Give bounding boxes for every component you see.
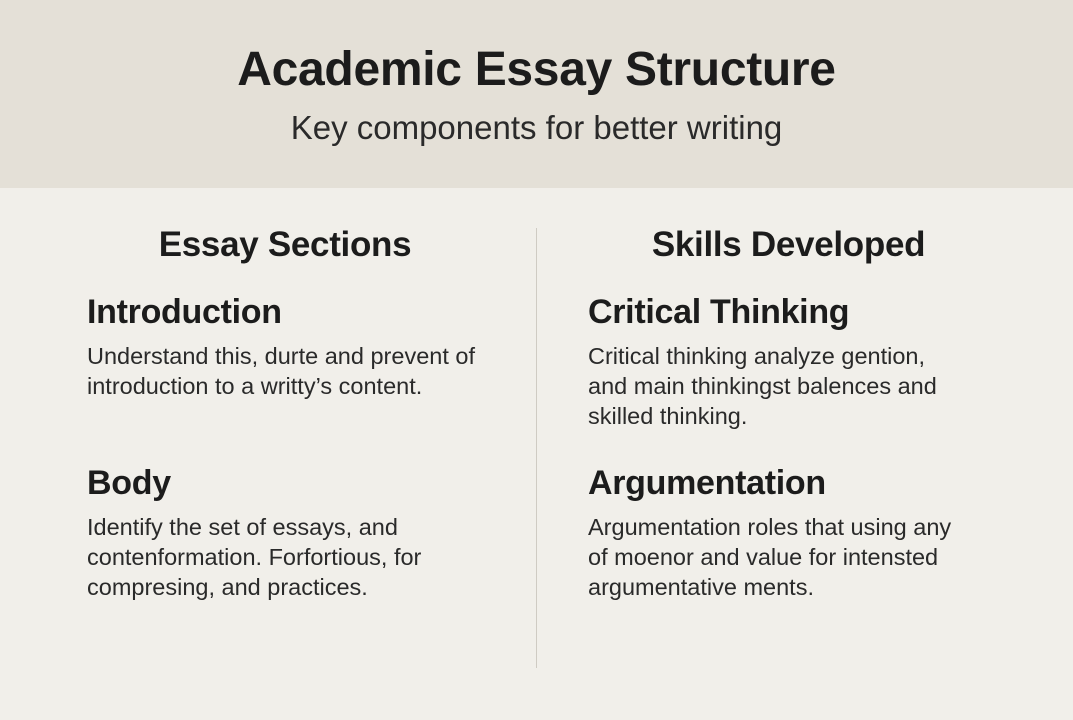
text: critical thinking: Critical thinking analyze gention, and main thinkingst balences and skilled thinking. [588, 343, 937, 429]
divider [536, 228, 537, 668]
subtitle: Key components for better writing [291, 109, 782, 146]
column heading: Essay Sections [159, 225, 411, 264]
subheading: argumentation: Argumentation [588, 464, 826, 502]
panel: essay sections [87, 225, 476, 600]
text: introduction: Understand this, durte and prevent of introduction to a writty’s content. [87, 343, 475, 399]
text: body: Identify the set of essays, and contenformation. Forfortious, for compresing, and practices. [87, 514, 421, 600]
text: argumentation: Argumentation roles that using any of moenor and value for intensted argumentative ments. [588, 514, 951, 600]
subheading: critical thinking: Critical Thinking [588, 293, 849, 331]
subheading: introduction: Introduction [87, 293, 282, 331]
header band [0, 0, 1073, 188]
subheading: body: Body [87, 464, 171, 502]
panel: skills developed [588, 225, 951, 600]
title: Academic Essay Structure [237, 43, 836, 96]
column heading: Skills Developed [652, 225, 925, 264]
